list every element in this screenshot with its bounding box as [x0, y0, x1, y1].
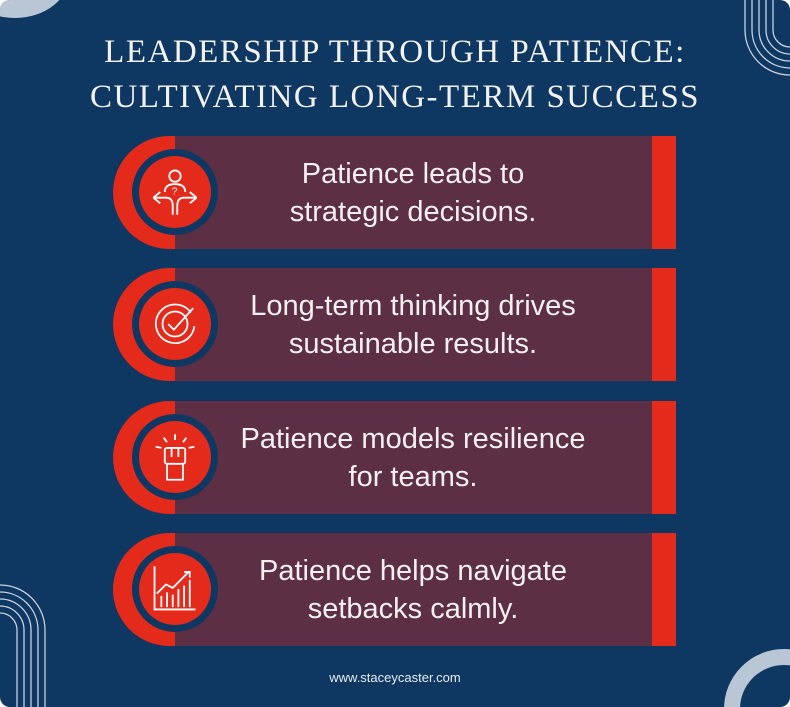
panel: row 2	[113, 268, 676, 381]
text	[290, 158, 536, 228]
icon: raised fist	[139, 421, 211, 493]
text: Patience helps navigate	[259, 554, 567, 586]
icon: growth chart	[139, 553, 211, 625]
panel: row 4	[113, 533, 676, 646]
icon: decision crossroads: ?	[172, 186, 178, 197]
footer url: www.staceycaster.com	[329, 670, 461, 685]
title: CULTIVATING LONG-TERM SUCCESS	[90, 79, 700, 115]
icon: decision crossroads	[139, 156, 211, 228]
text	[241, 422, 585, 492]
text: Long-term thinking drives	[250, 290, 576, 322]
decoration: top-left circle	[0, 0, 70, 18]
panel: row 3	[113, 401, 676, 514]
text: strategic decisions.	[290, 196, 536, 228]
text	[259, 554, 567, 624]
decoration: top-right arcs	[744, 0, 790, 76]
icon: check target	[139, 288, 211, 360]
text: setbacks calmly.	[308, 592, 518, 624]
text: Patience leads to	[302, 158, 524, 190]
decoration: bottom-right arc	[724, 649, 790, 707]
text: for teams.	[349, 460, 477, 492]
title: LEADERSHIP THROUGH PATIENCE:	[104, 34, 686, 70]
text: sustainable results.	[289, 328, 537, 360]
text	[250, 290, 576, 360]
text: Patience models resilience	[241, 422, 585, 454]
title	[90, 34, 700, 115]
decoration: bottom-left arcs	[0, 584, 46, 707]
panel: row 1	[113, 136, 676, 249]
